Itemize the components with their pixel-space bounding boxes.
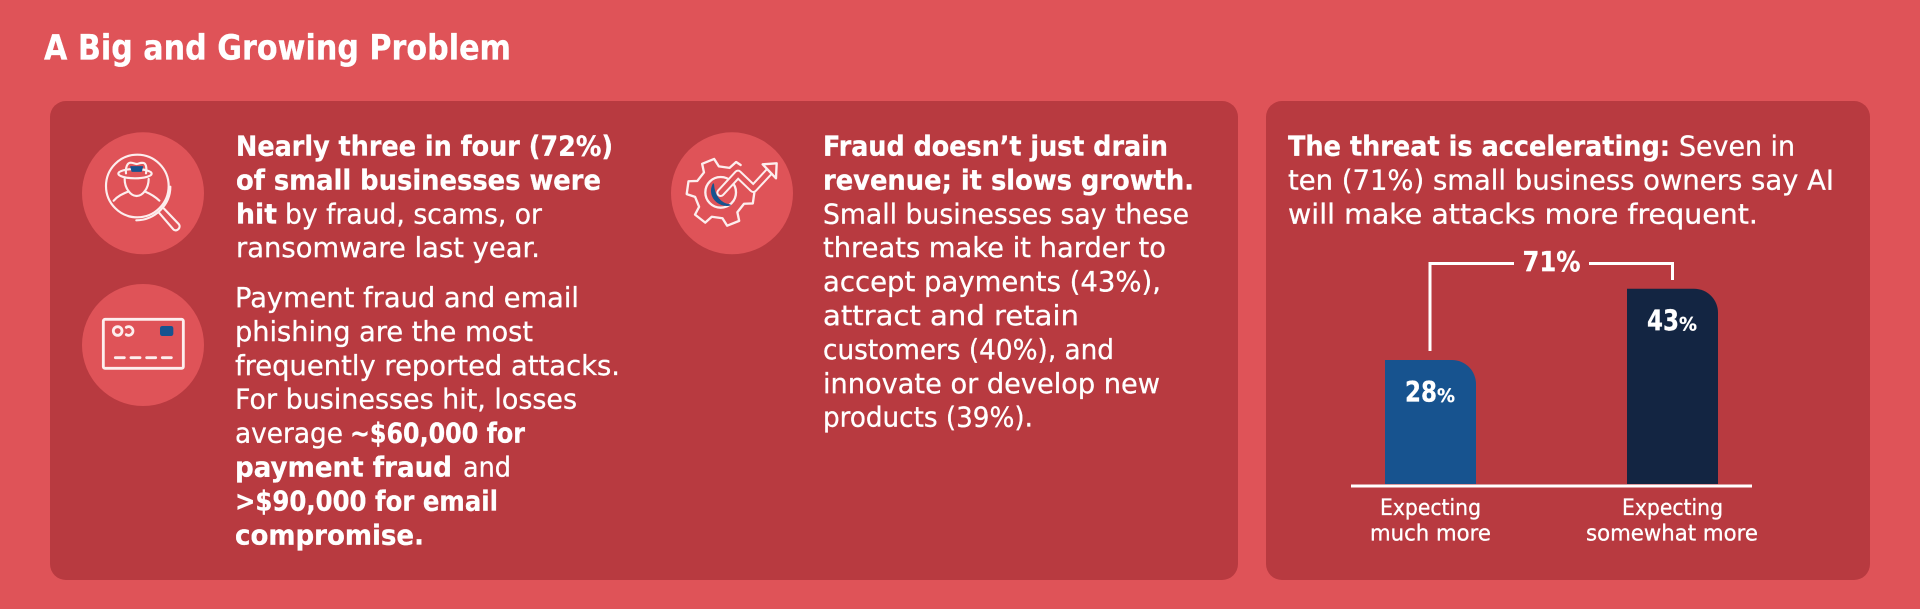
text: share of small businesses hit: hit	[236, 198, 277, 230]
text: share of small businesses hit	[236, 130, 613, 264]
text: payment fraud and email phishing losses: phishing are the most	[235, 316, 533, 348]
text: fraud slows growth: innovate or develop new	[823, 368, 1160, 400]
text: share of small businesses hit: by fraud, scams, or	[285, 198, 543, 230]
label: expecting somewhat more	[1586, 496, 1758, 547]
text: fraud slows growth: threats make it harder to	[823, 232, 1166, 264]
label: expecting much more: Expecting	[1380, 496, 1481, 521]
text: fraud slows growth: Fraud doesn’t just drain	[823, 130, 1168, 162]
panel: accelerating threat	[1266, 101, 1870, 580]
icon: credit card	[82, 284, 204, 406]
bar: expecting somewhat more 43%: 43	[1647, 305, 1679, 338]
bar: expecting much more 28%: %	[1437, 385, 1455, 407]
text: payment fraud and email phishing losses: >$90,000 for email	[235, 485, 498, 517]
text: payment fraud and email phishing losses: Payment fraud and email	[235, 282, 579, 314]
text: share of small businesses hit: ransomware last year.	[236, 232, 540, 264]
text: threat is accelerating: will make attacks more frequent.	[1288, 198, 1758, 230]
bar: expecting somewhat more 43%	[1627, 289, 1718, 484]
label: expecting somewhat more: Expecting	[1622, 496, 1723, 521]
text: fraud slows growth: attract and retain	[823, 300, 1079, 332]
bracket: 71% total	[1430, 246, 1672, 351]
icon: detective under magnifying glass	[82, 132, 204, 254]
text: payment fraud and email phishing losses: For businesses hit, losses	[235, 384, 577, 416]
text: fraud slows growth: accept payments (43%),	[823, 266, 1161, 298]
text: fraud slows growth: Small businesses say these	[823, 198, 1189, 230]
text: threat is accelerating	[1288, 130, 1834, 230]
text: fraud slows growth: products (39%).	[823, 402, 1033, 434]
text: payment fraud and email phishing losses: payment fraud	[235, 452, 452, 484]
label: expecting much more	[1370, 496, 1491, 547]
label: expecting much more: much more	[1370, 522, 1491, 547]
bar chart	[1351, 246, 1758, 547]
title: A Big and Growing Problem	[44, 28, 511, 68]
label: expecting somewhat more: somewhat more	[1586, 522, 1758, 547]
text: payment fraud and email phishing losses	[235, 282, 620, 551]
bar: expecting somewhat more 43%: %	[1679, 314, 1697, 336]
icon: gear with rising arrow	[671, 132, 793, 254]
text: payment fraud and email phishing losses: frequently reported attacks.	[235, 350, 620, 382]
text: share of small businesses hit: Nearly three in four (72%)	[236, 130, 613, 162]
bar: expecting much more 28%: 28	[1405, 376, 1437, 409]
text: payment fraud and email phishing losses: compromise.	[235, 519, 424, 551]
text: fraud slows growth	[823, 130, 1194, 434]
text: threat is accelerating: The threat is accelerating:	[1288, 130, 1670, 162]
text: fraud slows growth: revenue; it slows growth.	[823, 164, 1194, 196]
panel: fraud impact	[50, 101, 1238, 580]
text: threat is accelerating: Seven in	[1679, 130, 1795, 162]
text: threat is accelerating: ten (71%) small business owners say AI	[1288, 164, 1834, 196]
bracket: 71% total: 71%	[1522, 246, 1580, 278]
text: payment fraud and email phishing losses: ~$60,000 for	[350, 418, 525, 450]
text: payment fraud and email phishing losses: average	[235, 418, 343, 450]
text: payment fraud and email phishing losses: and	[463, 452, 511, 484]
text: fraud slows growth: customers (40%), and	[823, 334, 1114, 366]
text: share of small businesses hit: of small businesses were	[236, 164, 601, 196]
bar: expecting much more 28%	[1385, 360, 1476, 484]
axis line	[1351, 484, 1752, 488]
